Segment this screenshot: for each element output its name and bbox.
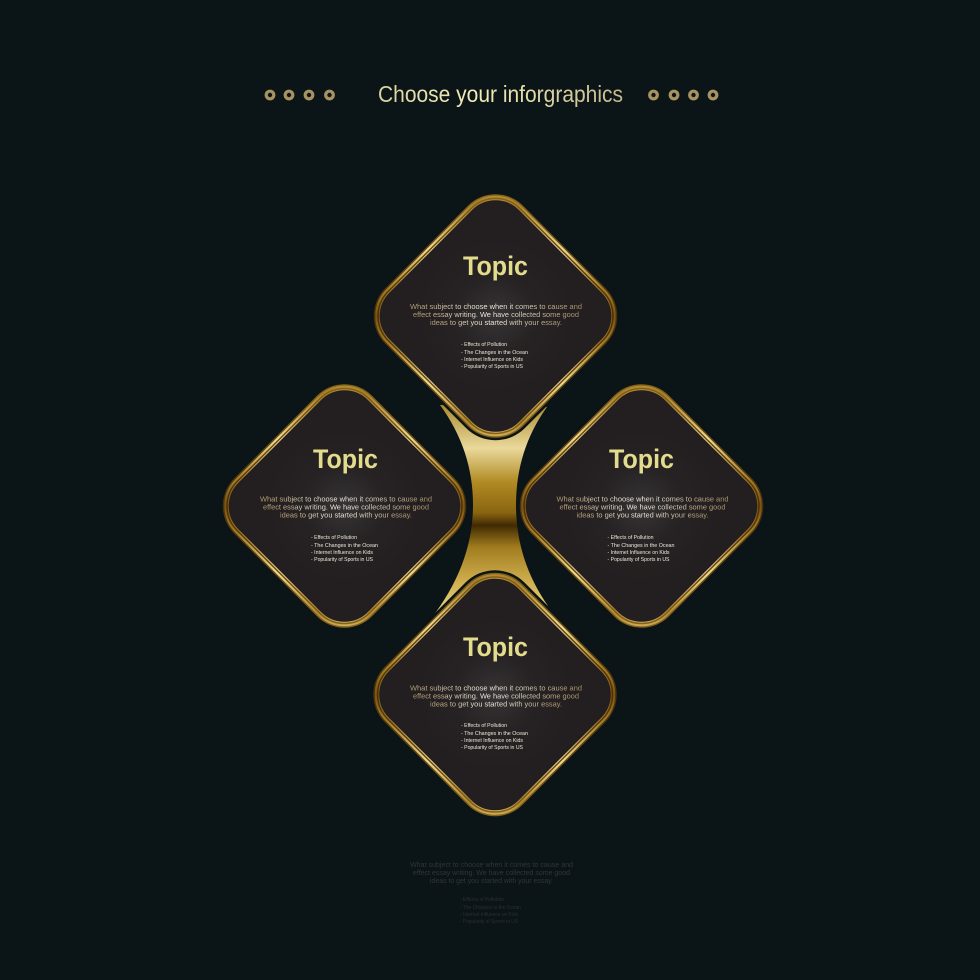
header row bbox=[266, 81, 717, 107]
text block: left description bbox=[260, 494, 432, 520]
text block: left description: ideas to get you started with your essay. bbox=[280, 510, 412, 520]
footer: faded description text: - Popularity of Sports in US bbox=[460, 919, 518, 925]
list: right topics: - The Changes in the Ocean bbox=[608, 543, 675, 549]
frame: left diamond bbox=[203, 365, 486, 647]
title: Choose your inforgraphics bbox=[378, 81, 623, 107]
list: bottom topics: - The Changes in the Ocean bbox=[461, 731, 528, 737]
footer: faded description text: - The Changes in the Ocean bbox=[460, 905, 521, 911]
text block: top description: What subject to choose when it comes to cause and bbox=[410, 302, 582, 311]
central gold hourglass connector bbox=[430, 405, 548, 620]
footer: faded description text: effect essay writing. We have collected some good bbox=[413, 868, 570, 877]
frame: top diamond bbox=[354, 175, 637, 457]
footer: faded description text: - Internet Influence on Kids bbox=[460, 912, 518, 918]
text block: top description: effect essay writing. We have collected some good bbox=[413, 310, 579, 319]
footer: faded description text: What subject to choose when it comes to cause and bbox=[410, 860, 573, 869]
list: bottom topics: - Internet Influence on Kids bbox=[461, 738, 523, 744]
text block: left description: effect essay writing. We have collected some good bbox=[263, 502, 429, 512]
list: right topics: - Internet Influence on Kids bbox=[608, 550, 670, 556]
list: right topics: - Popularity of Sports in US bbox=[608, 557, 670, 563]
list: left topics: - Internet Influence on Kids bbox=[311, 550, 373, 556]
footer: faded description text bbox=[410, 860, 573, 925]
panel: top diamond bbox=[354, 175, 637, 457]
list: bottom topics bbox=[461, 723, 528, 751]
right dot row bbox=[650, 91, 717, 99]
footer: faded description text: ideas to get you started with your essay. bbox=[430, 876, 553, 885]
frame: right diamond bbox=[500, 365, 783, 647]
frame: bottom diamond bbox=[354, 553, 636, 836]
text block: right description: ideas to get you started with your essay. bbox=[576, 510, 708, 520]
text block: right description: effect essay writing. We have collected some good bbox=[560, 502, 726, 512]
text block: left description: What subject to choose when it comes to cause and bbox=[260, 494, 432, 504]
footer: faded description text: - Effects of Pollution bbox=[460, 897, 504, 903]
left dot row bbox=[266, 91, 333, 99]
heading: left topic: Topic bbox=[313, 444, 378, 474]
panel: right diamond bbox=[500, 365, 783, 647]
list: top topics: - Effects of Pollution bbox=[461, 342, 507, 348]
heading: bottom topic: Topic bbox=[463, 632, 528, 662]
text block: top description: ideas to get you started with your essay. bbox=[430, 318, 562, 327]
text block: right description bbox=[556, 494, 728, 520]
list: top topics: - Internet Influence on Kids bbox=[461, 357, 523, 363]
list: right topics bbox=[608, 535, 675, 563]
list: bottom topics: - Popularity of Sports in US bbox=[461, 745, 524, 751]
panel: bottom diamond bbox=[354, 553, 636, 836]
text block: bottom description bbox=[410, 684, 582, 708]
heading: top topic: Topic bbox=[463, 251, 528, 281]
heading: right topic: Topic bbox=[609, 444, 674, 474]
list: top topics: - Popularity of Sports in US bbox=[461, 364, 524, 370]
text block: right description: What subject to choose when it comes to cause and bbox=[556, 494, 728, 504]
text block: bottom description: What subject to choose when it comes to cause and bbox=[410, 684, 582, 692]
list: left topics: - Effects of Pollution bbox=[311, 535, 357, 541]
list: right topics: - Effects of Pollution bbox=[608, 535, 654, 541]
list: top topics: - The Changes in the Ocean bbox=[461, 350, 528, 356]
text block: top description bbox=[410, 302, 582, 327]
list: bottom topics: - Effects of Pollution bbox=[461, 723, 507, 729]
list: left topics: - The Changes in the Ocean bbox=[311, 543, 378, 549]
list: left topics bbox=[311, 535, 378, 563]
text block: bottom description: ideas to get you started with your essay. bbox=[430, 700, 562, 708]
list: left topics: - Popularity of Sports in US bbox=[311, 557, 374, 563]
list: top topics bbox=[461, 342, 528, 370]
panel: left diamond bbox=[203, 365, 486, 647]
text block: bottom description: effect essay writing. We have collected some good bbox=[413, 692, 579, 700]
